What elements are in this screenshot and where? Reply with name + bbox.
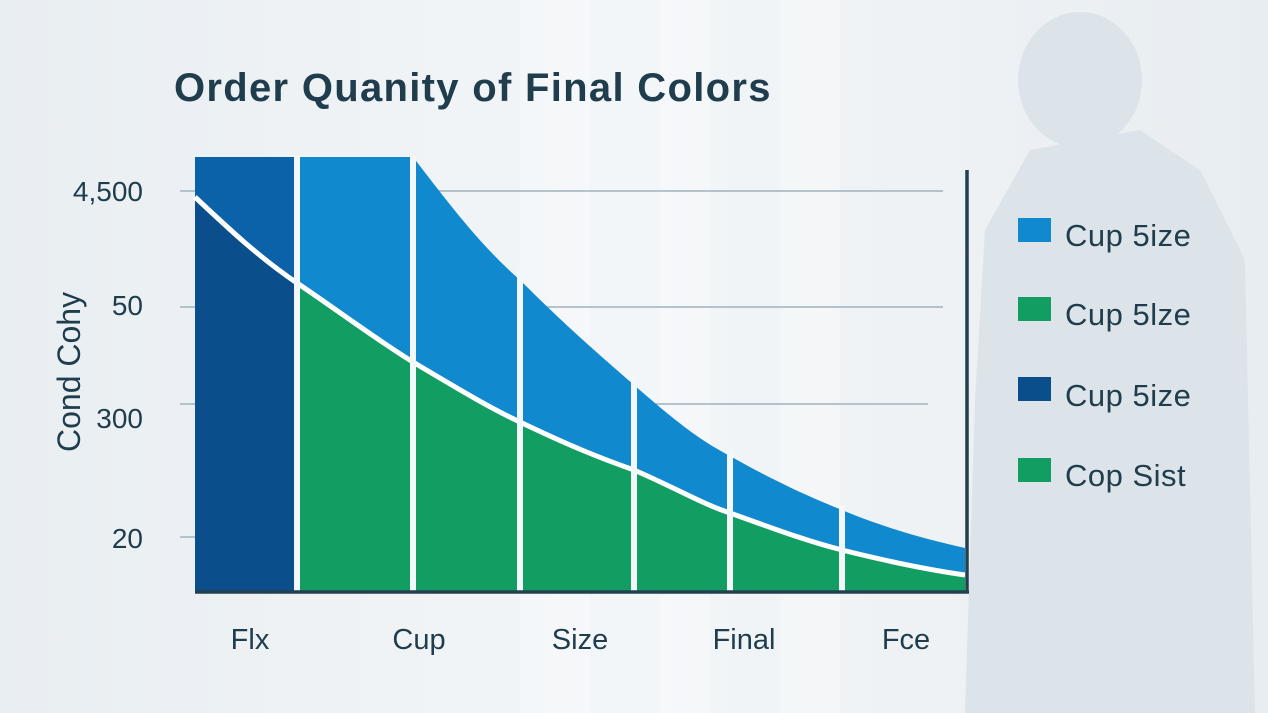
legend: Cup 5lze xyxy=(1065,297,1191,332)
y axis title: Cond Cohy xyxy=(51,292,87,452)
x axis labels: Final xyxy=(713,624,775,656)
y axis labels: 300 xyxy=(96,403,143,434)
y axis labels: 20 xyxy=(112,523,143,554)
legend: Cup 5ize xyxy=(1065,378,1191,413)
legend: Cop Sist xyxy=(1065,458,1186,493)
x axis labels: Flx xyxy=(231,624,270,656)
background figure: man xyxy=(965,12,1255,713)
area: blue top xyxy=(195,157,965,592)
x axis labels: Cup xyxy=(392,624,446,656)
y axis labels: 4,500 xyxy=(73,176,143,207)
y axis labels: 50 xyxy=(112,290,143,321)
x axis labels: Fce xyxy=(882,624,930,656)
y axis labels xyxy=(73,176,143,554)
gridlines xyxy=(180,191,943,537)
title: Order Quanity of Final Colors xyxy=(174,66,772,110)
area: green bottom xyxy=(195,197,965,592)
chart: stacked area xyxy=(195,155,965,592)
x axis labels: Size xyxy=(552,624,608,656)
white boundary curve xyxy=(195,197,965,575)
legend xyxy=(1018,218,1191,493)
axes xyxy=(195,170,969,593)
x axis labels xyxy=(231,624,930,656)
legend: Cup 5ize xyxy=(1065,218,1191,253)
first column dark xyxy=(195,157,297,283)
background: window panes xyxy=(520,0,840,713)
white separators xyxy=(297,155,842,592)
